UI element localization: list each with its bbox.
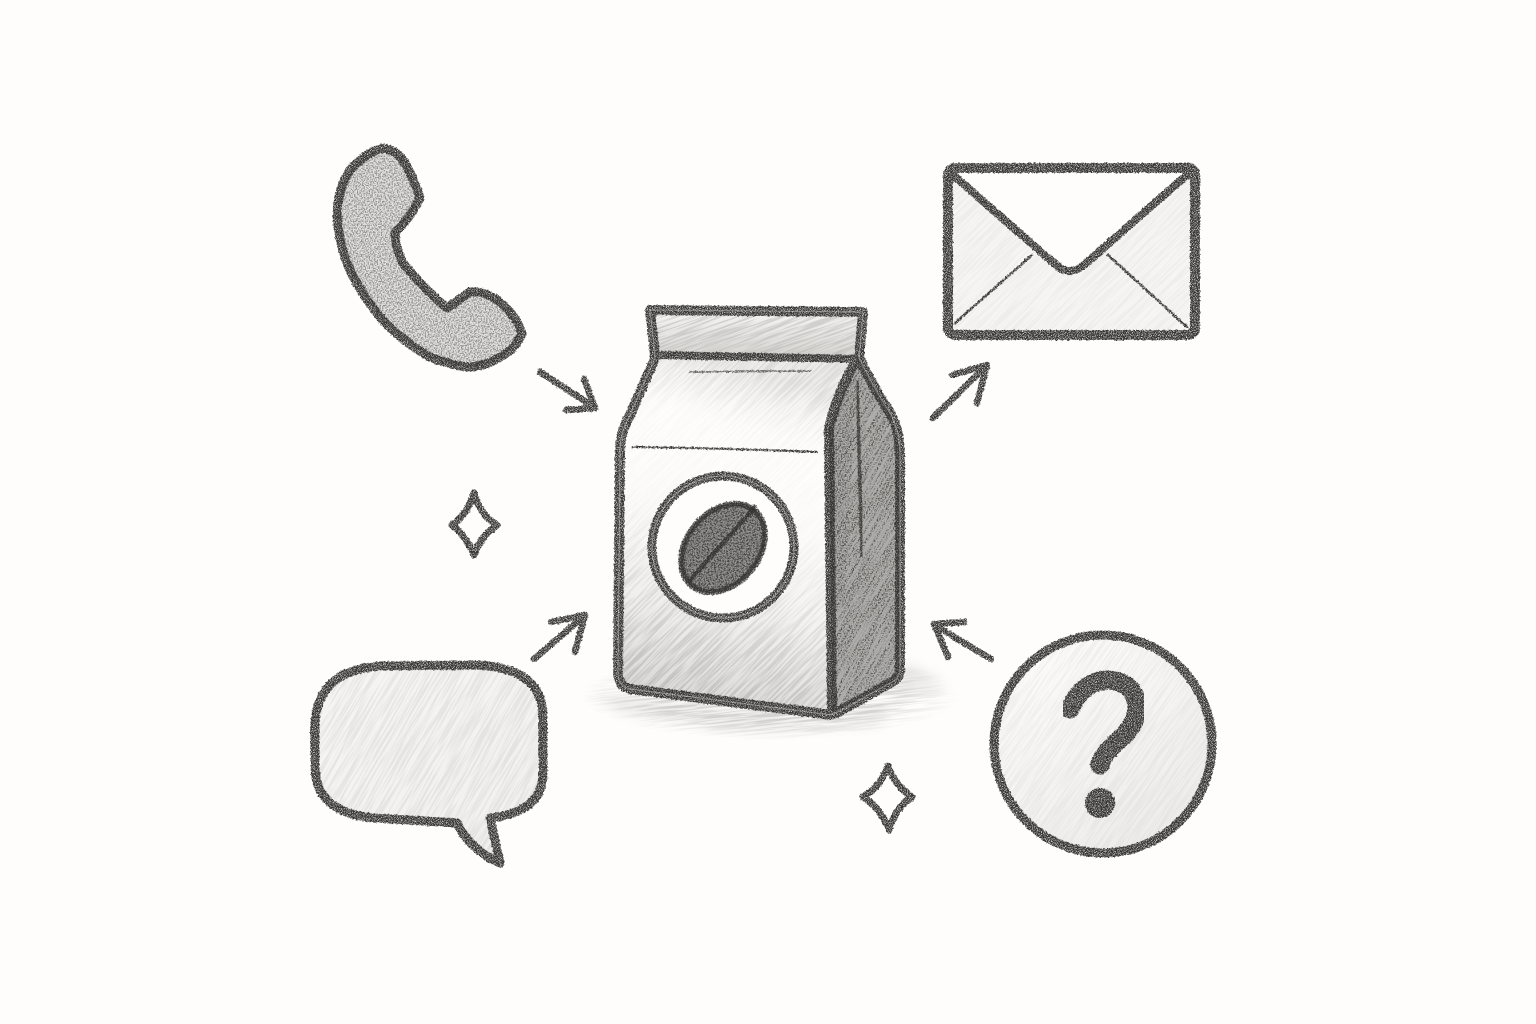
arrow: phone to bag	[540, 372, 595, 410]
bag top fold	[650, 310, 863, 358]
icon: question mark circle	[988, 630, 1217, 858]
bag front panel	[618, 356, 857, 713]
icon: coffee bag	[594, 304, 944, 736]
bag side gusset	[829, 358, 900, 713]
arrow: question to bag	[934, 622, 991, 659]
coffee bean badge	[651, 475, 795, 619]
bag ground shadow	[594, 664, 944, 736]
coffee bean	[663, 486, 783, 610]
icon: envelope	[942, 162, 1201, 341]
icon: telephone handset	[337, 148, 522, 367]
arrow: bag to envelope	[933, 365, 987, 418]
question mark glyph	[1070, 680, 1137, 818]
icon: sparkle bottom	[863, 766, 912, 830]
icon: speech bubble	[310, 660, 548, 868]
bag outline	[618, 310, 900, 715]
icon: sparkle left	[452, 493, 497, 555]
arrow: bubble to bag	[534, 615, 585, 659]
